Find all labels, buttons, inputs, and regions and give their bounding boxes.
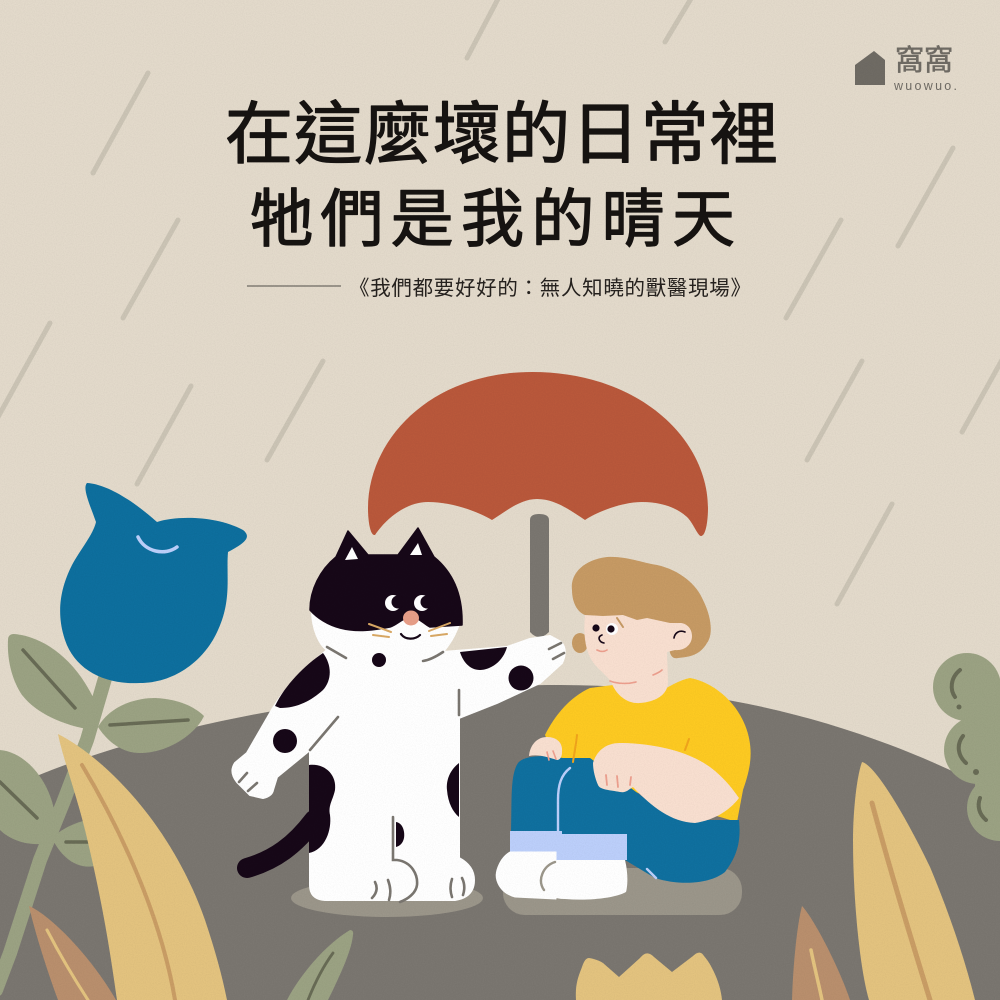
- right yellow leaf: [853, 762, 975, 1000]
- flower: [0, 483, 247, 990]
- jeans seam: [558, 768, 656, 878]
- cat spots: [273, 647, 534, 853]
- upper left leaf: [8, 634, 93, 730]
- person near hand: [529, 737, 562, 760]
- cat mouth: [401, 634, 420, 639]
- person neck and face: [584, 615, 692, 703]
- title: [225, 97, 778, 255]
- icon: house: [855, 51, 885, 85]
- person shadow: [503, 868, 742, 915]
- left tan leaf: [29, 906, 116, 1000]
- person arm: [593, 743, 739, 823]
- lower left leaf: [0, 750, 55, 844]
- small sage leaf: [287, 930, 353, 1000]
- bottom yellow bud: [576, 953, 722, 1000]
- rain streaks: [0, 0, 1000, 604]
- cat ears inner: [345, 543, 422, 560]
- shirt folds: [573, 735, 689, 762]
- lower right leaf: [52, 820, 95, 867]
- subtitle: 《我們都要好好的：無人知曉的獸醫現場》: [349, 277, 751, 300]
- cat: [232, 528, 565, 902]
- right tan leaf: [792, 906, 850, 1000]
- cat head markings: [310, 528, 462, 631]
- logo wordmark: 窩窩: [895, 44, 953, 77]
- umbrella canopy: [368, 372, 708, 536]
- person hair: [572, 557, 711, 658]
- left yellow leaf: [58, 734, 227, 1000]
- person cuffs: [510, 831, 627, 860]
- person: [496, 557, 751, 900]
- upper right leaf: [98, 698, 204, 753]
- right bush: [933, 653, 1000, 841]
- cat shadow: [291, 879, 483, 917]
- cat line details: [239, 643, 564, 902]
- person shirt: [545, 678, 751, 822]
- bloom highlight: [138, 537, 177, 552]
- logo latin name: wuowuo.: [893, 79, 957, 93]
- person jeans: [511, 756, 740, 883]
- person small hair curl: [572, 633, 588, 653]
- flower stem: [0, 675, 106, 990]
- ground hill: [0, 685, 1000, 1000]
- umbrella pole: [530, 514, 549, 637]
- cat nose: [403, 610, 419, 626]
- person shoes: [496, 852, 627, 900]
- umbrella: [368, 372, 708, 637]
- title line 2: 牠們是我的晴天: [250, 185, 735, 255]
- blue bloom: [60, 483, 247, 683]
- cat body: [232, 610, 565, 900]
- person face details: [592, 618, 685, 683]
- cat whiskers: [369, 623, 450, 637]
- logo: [855, 44, 957, 93]
- cat eyes: [385, 595, 434, 611]
- title line 1: 在這麼壞的日常裡: [225, 97, 778, 173]
- cat tail: [247, 820, 314, 868]
